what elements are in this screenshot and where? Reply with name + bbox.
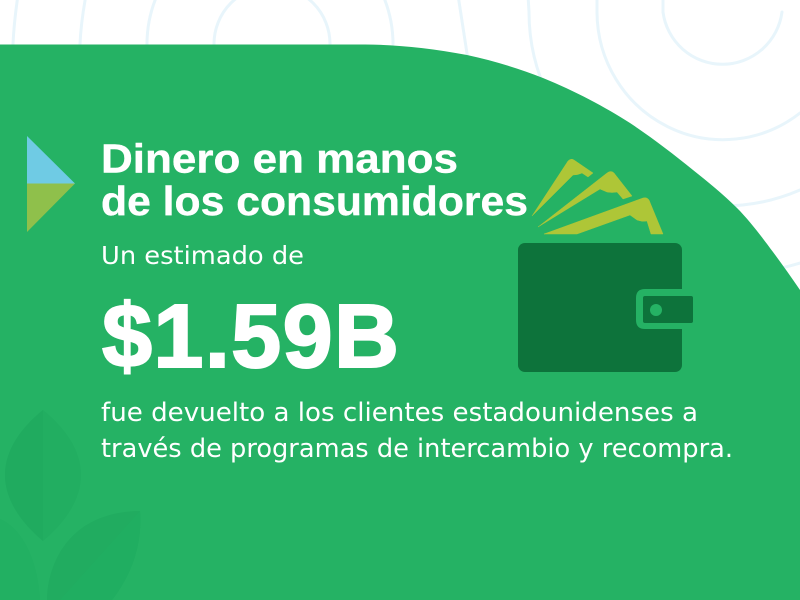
icon: leaves	[0, 410, 140, 600]
bills	[532, 159, 663, 234]
icon: wallet with bills	[518, 159, 693, 372]
text: intro: Un estimado de	[101, 241, 304, 270]
wallet body	[518, 243, 682, 372]
heading: Dinero en manos	[101, 136, 458, 182]
icon: arrow marker	[27, 136, 75, 232]
heading	[101, 136, 528, 224]
text: description: fue devuelto a los clientes estadounidenses a	[101, 398, 698, 428]
text: description	[101, 398, 733, 464]
wallet clasp	[636, 289, 693, 329]
heading: de los consumidores	[101, 178, 528, 224]
text: description: través de programas de intercambio y recompra.	[101, 434, 733, 464]
big number: $1.59B	[102, 287, 399, 387]
